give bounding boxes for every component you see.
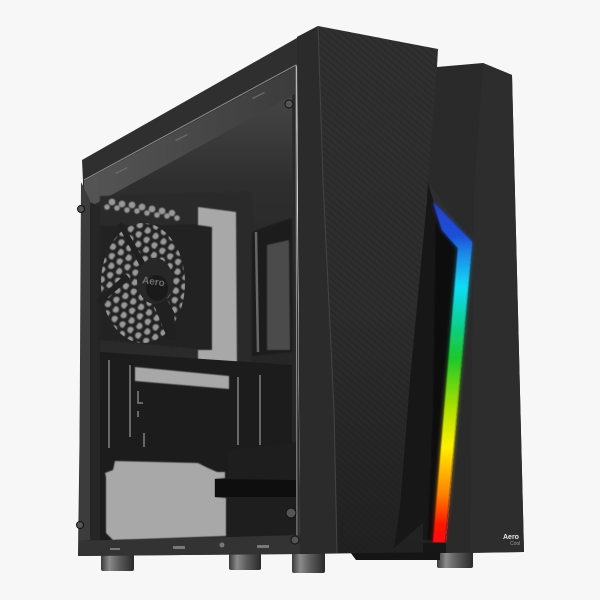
side chamfer	[297, 26, 337, 554]
carbon texture	[318, 26, 438, 553]
lower dark area	[100, 352, 292, 540]
dark recess	[394, 183, 458, 548]
rail cutouts	[110, 542, 269, 550]
rear panel dark backing	[100, 192, 252, 400]
PC case product illustration	[76, 26, 524, 573]
right chamfer	[470, 63, 524, 553]
bottom rail	[78, 535, 300, 556]
fan frame	[100, 224, 212, 350]
feet	[101, 550, 473, 573]
brand logo: Cool	[510, 541, 520, 547]
glass interior	[95, 92, 296, 540]
glass top band	[84, 67, 295, 204]
glass edge highlight	[84, 65, 297, 552]
PSU cutout plate	[105, 461, 226, 540]
LED glow	[433, 202, 472, 542]
fan blades / spokes	[96, 222, 176, 340]
base line under front	[423, 543, 446, 553]
fan hub logo: Aero	[141, 275, 165, 289]
RGB LED strip	[433, 202, 472, 542]
fan	[101, 222, 185, 343]
left frame strip	[79, 182, 90, 541]
recess inner shadow	[428, 215, 458, 540]
side glass panel	[76, 65, 300, 556]
top band vents	[115, 92, 265, 174]
expansion bar plate	[135, 367, 229, 389]
right interior: bracket	[252, 218, 292, 356]
thumbscrews	[76, 100, 299, 544]
front right panel	[428, 63, 524, 553]
top panel	[82, 26, 330, 181]
front panel main face	[297, 26, 472, 554]
top perforation row	[104, 199, 180, 221]
light upper plate	[198, 207, 237, 370]
brand logo	[503, 534, 520, 547]
chamfer line	[318, 26, 337, 553]
brand logo: Aero	[503, 534, 519, 541]
drive cage	[228, 442, 296, 536]
expansion slot marks	[109, 360, 260, 448]
